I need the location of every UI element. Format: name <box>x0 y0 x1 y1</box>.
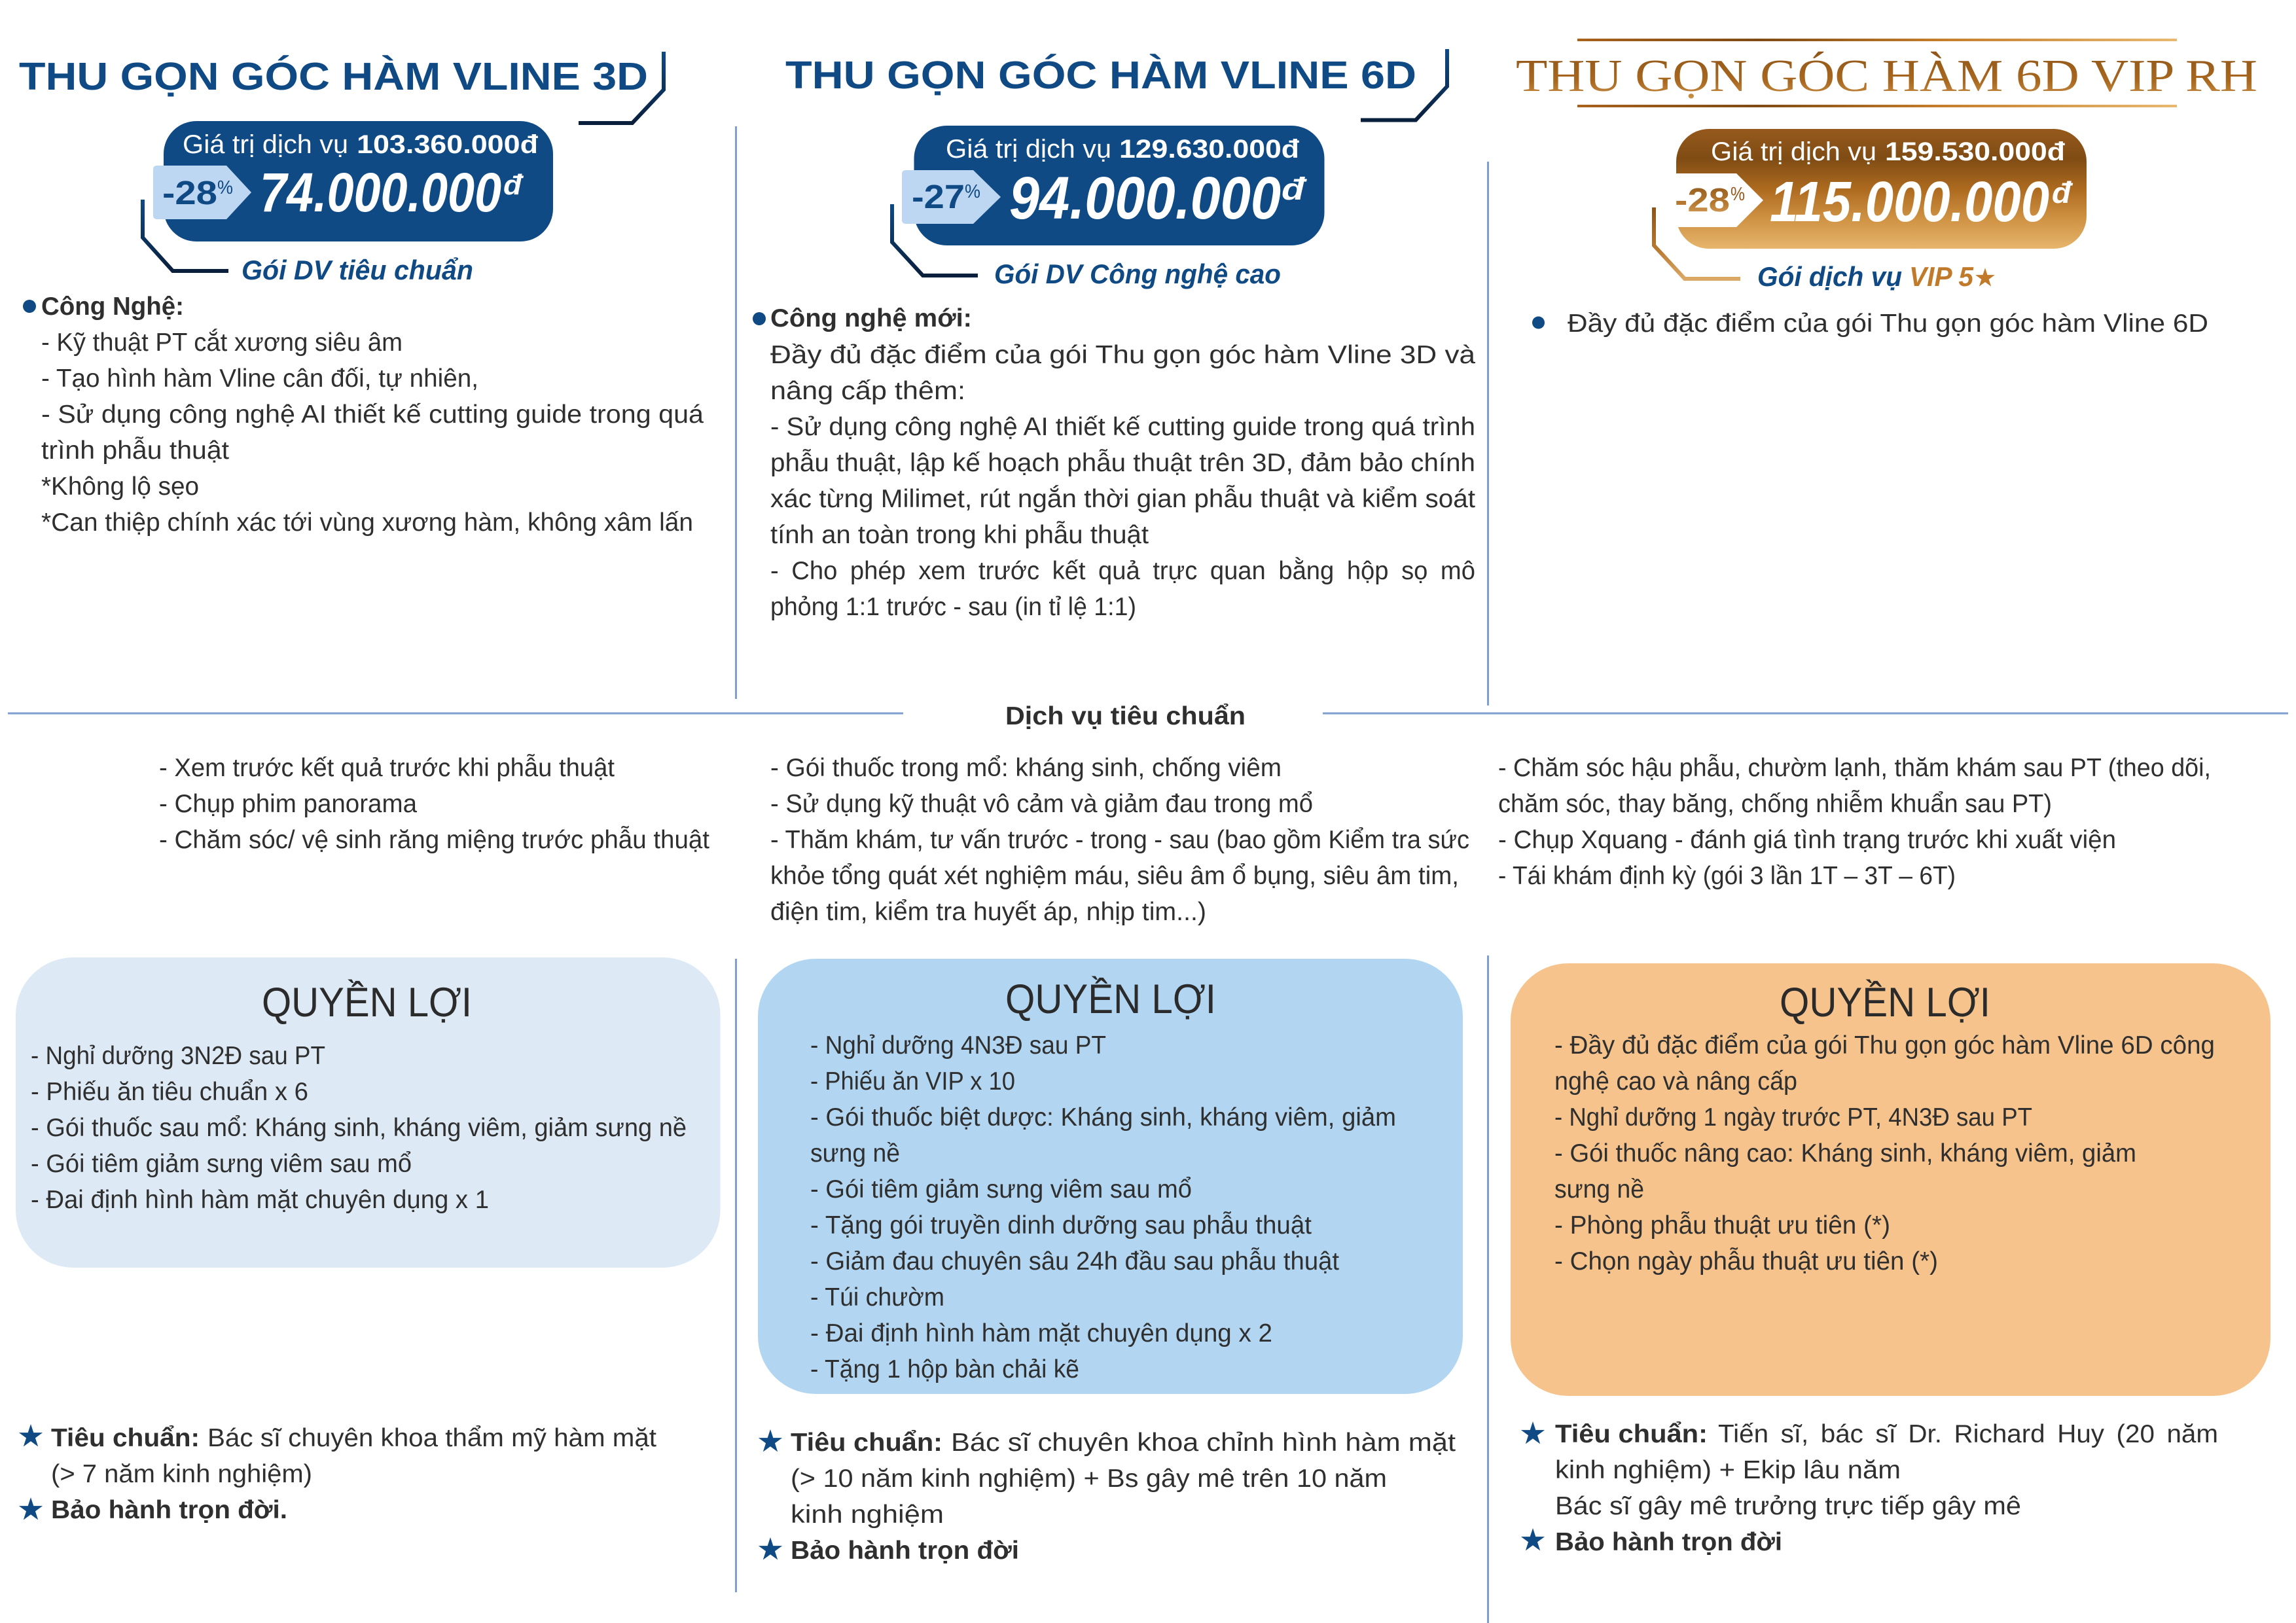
text block: technology Vline 6D: - Cho phép xem trước kết quả trực quan bằng hộp sọ mô <box>770 557 1475 585</box>
discounted price: 74.000.000 <box>260 162 501 223</box>
text block: standards and warranty 6D VIP: Tiêu chuẩn: <box>1555 1420 1708 1448</box>
discounted price: đ <box>2052 175 2073 209</box>
benefits list: - Tặng gói truyền dinh dưỡng sau phẫu thuật <box>810 1211 1312 1240</box>
benefits list: - Đai định hình hàm mặt chuyên dụng x 1 <box>31 1186 489 1214</box>
text block: standards and warranty Vline 6D <box>759 1429 1456 1565</box>
discount badge <box>902 170 1001 224</box>
section heading: standard service: Dịch vụ tiêu chuẩn <box>1005 702 1246 730</box>
title bracket: Vline 6D <box>1361 49 1447 120</box>
benefits list: - Nghỉ dưỡng 3N2Đ sau PT <box>31 1042 325 1070</box>
panel: Vline 6D header and price <box>785 49 1447 289</box>
heading: QUYỀN LỢI <box>262 979 472 1026</box>
icon: star <box>19 1424 43 1446</box>
discounted price: đ <box>1282 172 1307 207</box>
package label <box>1757 261 1995 292</box>
package bracket <box>143 200 228 271</box>
package bracket <box>892 204 978 276</box>
package label: Gói DV Công nghệ cao <box>994 259 1281 289</box>
text block: technology Vline 6D: Đầy đủ đặc điểm của gói Thu gọn góc hàm Vline 3D và <box>770 341 1476 369</box>
benefits list: - Nghỉ dưỡng 1 ngày trước PT, 4N3Đ sau PT <box>1554 1103 2032 1132</box>
benefits list: - Gói tiêm giảm sưng viêm sau mổ <box>31 1150 412 1178</box>
service value: 129.630.000đ <box>1119 135 1300 164</box>
text block: technology Vline 3D: trình phẫu thuật <box>41 437 229 465</box>
column divider: bottom right <box>1487 955 1489 1623</box>
text block: standards and warranty Vline 3D: Bác sĩ chuyên khoa thẩm mỹ hàm mặt <box>207 1424 656 1452</box>
discount badge: % <box>965 181 980 202</box>
bullet <box>1532 317 1545 329</box>
benefits list: - Gói tiêm giảm sưng viêm sau mổ <box>810 1175 1192 1204</box>
benefits list <box>1554 1031 2215 1275</box>
heading: QUYỀN LỢI <box>1005 976 1216 1022</box>
service value: 103.360.000đ <box>357 130 539 159</box>
discounted price: đ <box>503 169 524 201</box>
column divider: top left <box>735 126 737 699</box>
title: Vline 3D: THU GỌN GÓC HÀM VLINE 3D <box>19 55 648 98</box>
discount badge <box>1672 173 1763 227</box>
discount badge: -27 <box>912 178 965 215</box>
discount badge: -28 <box>162 174 217 211</box>
bullet <box>753 312 766 325</box>
title: Vline 6D: THU GỌN GÓC HÀM VLINE 6D <box>785 54 1416 97</box>
benefits list: - Gói thuốc sau mổ: Kháng sinh, kháng viêm, giảm sưng nề <box>31 1114 687 1142</box>
panel: benefits 6D VIP <box>1511 963 2270 1396</box>
section heading: standard service <box>8 702 2288 730</box>
heading: QUYỀN LỢI <box>1780 979 1990 1026</box>
text block: standard service column 3: - Tái khám định kỳ (gói 3 lần 1T – 3T – 6T) <box>1498 862 1956 890</box>
text block: standards and warranty 6D VIP: Bác sĩ gây mê trưởng trực tiếp gây mê <box>1555 1492 2021 1520</box>
icon: star <box>19 1497 43 1520</box>
discounted price: 94.000.000 <box>1009 165 1281 232</box>
benefits list: - Giảm đau chuyên sâu 24h đầu sau phẫu thuật <box>810 1247 1339 1275</box>
title: 6D VIP RH: THU GỌN GÓC HÀM 6D VIP RH <box>1516 51 2257 101</box>
benefits list <box>31 1042 687 1214</box>
text block: technology Vline 3D: - Sử dụng công nghệ AI thiết kế cutting guide trong quá <box>41 401 704 429</box>
service value: Giá trị dịch vụ <box>183 130 348 159</box>
text block: technology Vline 6D: xác từng Milimet, rút ngắn thời gian phẫu thuật và kiểm soát <box>770 485 1475 513</box>
benefits list: - Đai định hình hàm mặt chuyên dụng x 2 <box>810 1319 1272 1347</box>
text block: standard service column 3: - Chăm sóc hậu phẫu, chườm lạnh, thăm khám sau PT (theo dõi, <box>1498 754 2211 782</box>
text block: standards and warranty 6D VIP <box>1521 1420 2218 1556</box>
text block: standards and warranty Vline 6D: kinh nghiệm <box>791 1501 944 1529</box>
icon: star <box>759 1429 782 1452</box>
text block: standards and warranty 6D VIP: Tiến sĩ, bác sĩ Dr. Richard Huy (20 năm <box>1718 1420 2218 1448</box>
text block: standards and warranty Vline 6D: Tiêu chuẩn: <box>791 1429 942 1457</box>
discount badge <box>153 166 251 219</box>
bullet <box>23 300 36 313</box>
text block: technology Vline 3D: - Kỹ thuật PT cắt xương siêu âm <box>41 329 403 357</box>
service value <box>946 135 1300 164</box>
text block: standard service column 2 <box>770 754 1469 926</box>
text block: standards and warranty Vline 3D: (> 7 năm kinh nghiệm) <box>51 1460 312 1488</box>
icon: star <box>759 1537 782 1560</box>
benefits list: - Nghỉ dưỡng 4N3Đ sau PT <box>810 1031 1106 1060</box>
benefits list: - Tặng 1 hộp bàn chải kẽ <box>810 1355 1079 1383</box>
text block: standard service column 2: - Gói thuốc trong mổ: kháng sinh, chống viêm <box>770 754 1282 782</box>
text block: technology Vline 6D: tính an toàn trong khi phẫu thuật <box>770 521 1149 549</box>
text block: technology Vline 6D: phẫu thuật, lập kế hoạch phẫu thuật trên 3D, đảm bảo chính <box>770 449 1475 477</box>
service value: Giá trị dịch vụ <box>1711 137 1876 166</box>
text block: standard service column 1: - Chụp phim panorama <box>159 790 418 818</box>
text block: standard service column 2: khỏe tổng quát xét nghiệm máu, siêu âm ổ bụng, siêu âm tim, <box>770 862 1459 890</box>
discount badge: % <box>1731 184 1745 205</box>
text block: standard service column 1 <box>159 754 709 854</box>
title: 6D VIP RH <box>1516 39 2257 107</box>
discounted price: 115.000.000 <box>1770 170 2049 234</box>
text block: standards and warranty 6D VIP: kinh nghiệm) + Ekip lâu năm <box>1555 1456 1901 1484</box>
benefits list: - Phiếu ăn VIP x 10 <box>810 1067 1015 1096</box>
text block: technology Vline 3D: *Không lộ sẹo <box>41 473 199 501</box>
text block: technology Vline 3D: *Can thiệp chính xác tới vùng xương hàm, không xâm lấn <box>41 508 693 537</box>
price pill: 6D VIP RH <box>1672 129 2087 249</box>
benefits list: sưng nề <box>810 1139 900 1168</box>
icon: star <box>1521 1528 1545 1550</box>
benefits list: - Đầy đủ đặc điểm của gói Thu gọn góc hàm Vline 6D công <box>1554 1031 2215 1060</box>
text block: technology Vline 6D: phỏng 1:1 trước - sau (in tỉ lệ 1:1) <box>770 593 1136 621</box>
text block: technology Vline 3D <box>23 293 704 537</box>
benefits list: - Phiếu ăn tiêu chuẩn x 6 <box>31 1078 308 1106</box>
column divider: top right <box>1487 162 1489 705</box>
service value <box>183 130 539 159</box>
benefits list: - Gói thuốc nâng cao: Kháng sinh, kháng viêm, giảm <box>1554 1139 2136 1168</box>
text block: technology Vline 6D: Công nghệ mới: <box>770 304 972 332</box>
service value: Giá trị dịch vụ <box>946 135 1111 164</box>
text block: standard service column 2: - Thăm khám, tư vấn trước - trong - sau (bao gồm Kiểm tra sức <box>770 826 1469 854</box>
text block: technology Vline 3D: Công Nghệ: <box>41 293 184 321</box>
text block: standards and warranty Vline 3D: Bảo hành trọn đời. <box>51 1496 287 1524</box>
benefits list: - Gói thuốc biệt dược: Kháng sinh, kháng viêm, giảm <box>810 1103 1396 1132</box>
text block: standards and warranty 6D VIP: Bảo hành trọn đời <box>1555 1528 1782 1556</box>
benefits list: - Phòng phẫu thuật ưu tiên (*) <box>1554 1211 1890 1240</box>
discount badge: % <box>217 177 233 198</box>
text block: standards and warranty Vline 6D: (> 10 năm kinh nghiệm) + Bs gây mê trên 10 năm <box>791 1465 1387 1493</box>
title bracket: Vline 3D <box>579 52 664 123</box>
column divider: bottom left <box>735 959 737 1592</box>
benefits list: sưng nề <box>1554 1175 1644 1204</box>
discount badge: -28 <box>1675 181 1730 219</box>
text block: standards and warranty Vline 6D: Bảo hành trọn đời <box>791 1537 1019 1565</box>
service value <box>1711 137 2066 166</box>
text block: standards and warranty Vline 3D <box>19 1424 656 1524</box>
text block: standard service column 2: - Sử dụng kỹ thuật vô cảm và giảm đau trong mổ <box>770 790 1313 818</box>
package label: Gói DV tiêu chuẩn <box>242 255 473 285</box>
price pill: Vline 3D <box>153 121 553 241</box>
text block: technology Vline 6D: - Sử dụng công nghệ AI thiết kế cutting guide trong quá trình <box>770 413 1475 441</box>
text block: standards and warranty Vline 3D: Tiêu chuẩn: <box>51 1424 200 1452</box>
text block: standard service column 3: - Chụp Xquang - đánh giá tình trạng trước khi xuất viện <box>1498 826 2116 854</box>
price pill: Vline 6D <box>902 126 1325 245</box>
text block: standard service column 1: - Xem trước kết quả trước khi phẫu thuật <box>159 754 615 782</box>
panel: benefits Vline 6D <box>758 959 1463 1394</box>
benefits list <box>810 1031 1396 1383</box>
text block: standard service column 1: - Chăm sóc/ vệ sinh răng miệng trước phẫu thuật <box>159 826 709 854</box>
text block: technology Vline 3D: - Tạo hình hàm Vline cân đối, tự nhiên, <box>41 365 478 393</box>
text block: technology 6D VIP: Đầy đủ đặc điểm của gói Thu gọn góc hàm Vline 6D <box>1568 310 2208 338</box>
text block: technology Vline 6D <box>753 304 1476 621</box>
panel: 6D VIP RH header and price <box>1516 39 2257 292</box>
icon: star <box>1521 1421 1545 1444</box>
benefits list: - Túi chườm <box>810 1283 944 1311</box>
text block: standard service column 3 <box>1498 754 2211 890</box>
text block: standards and warranty Vline 6D: Bác sĩ chuyên khoa chỉnh hình hàm mặt <box>951 1429 1456 1457</box>
benefits list: nghệ cao và nâng cấp <box>1554 1067 1797 1096</box>
text block: standard service column 2: điện tim, kiểm tra huyết áp, nhịp tim...) <box>770 898 1206 926</box>
benefits list: - Chọn ngày phẫu thuật ưu tiên (*) <box>1554 1247 1938 1275</box>
package label: VIP 5 <box>1909 261 1974 292</box>
package label: Gói dịch vụ <box>1757 261 1902 292</box>
package bracket <box>1654 207 1740 279</box>
panel: benefits Vline 3D <box>16 957 720 1268</box>
text block: technology Vline 6D: nâng cấp thêm: <box>770 377 965 405</box>
text block: standard service column 3: chăm sóc, thay băng, chống nhiễm khuẩn sau PT) <box>1498 790 2052 818</box>
panel: Vline 3D header and price <box>19 52 664 285</box>
service value: 159.530.000đ <box>1885 137 2066 166</box>
